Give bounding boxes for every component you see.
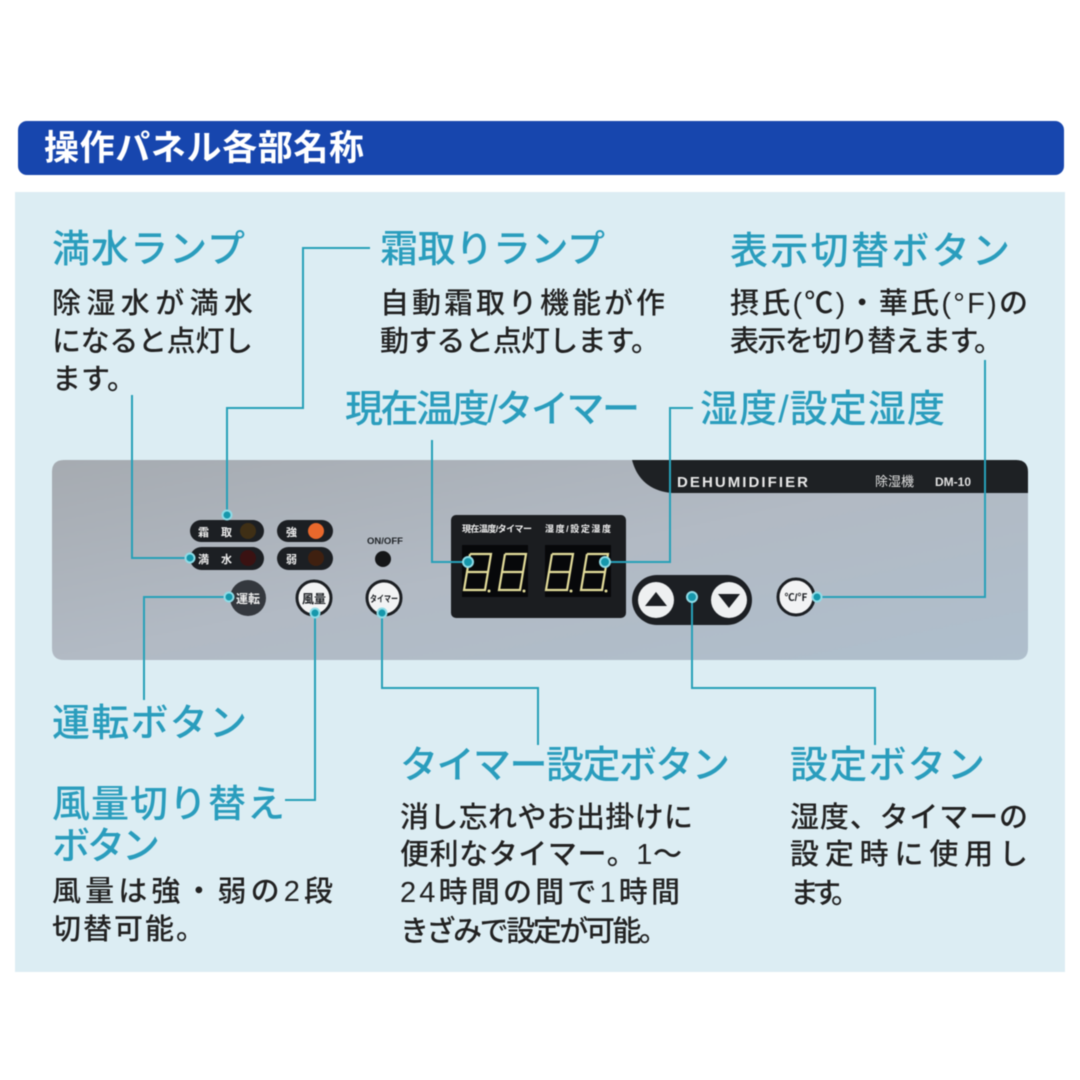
label: display switch button — [730, 231, 1028, 358]
label: air volume button: ボタン — [52, 826, 160, 868]
label: timer setting button — [400, 745, 730, 948]
lamp: weak: 弱 — [286, 553, 297, 566]
label: defrost lamp: 自動霜取り機能が作 — [380, 287, 665, 320]
title bar — [18, 121, 1064, 175]
button: timer — [367, 581, 401, 615]
button: C/F switch: ℃/℉ — [785, 593, 807, 604]
background panel — [15, 192, 1065, 972]
label: timer setting button: 消し忘れやお出掛けに — [400, 801, 693, 834]
control panel illustration — [52, 460, 1028, 660]
lamp: weak — [277, 547, 333, 570]
digital display — [451, 515, 626, 618]
button: air volume: 風量 — [302, 592, 326, 606]
label: setting button: 設定ボタン — [790, 745, 985, 787]
up/down buttons — [632, 575, 752, 625]
label: timer setting button: タイマー設定ボタン — [400, 745, 730, 787]
label: timer setting button: 24時間の間で1時間 — [400, 876, 680, 909]
button: C/F switch — [778, 579, 814, 615]
label: display switch button: 表示を切り替えます。 — [730, 325, 1003, 358]
connector lines — [132, 248, 985, 800]
lamp: full water — [190, 547, 264, 570]
model name plate: 除湿機 — [875, 474, 914, 489]
label: full water lamp: ます。 — [52, 364, 136, 396]
label: air volume button: 風量は強・弱の2段 — [52, 875, 333, 908]
label: full water lamp — [52, 229, 253, 396]
label: timer setting button: きざみで設定が可能。 — [400, 914, 668, 948]
digits — [464, 554, 608, 592]
digital display: 現在温度/タイマー — [462, 523, 532, 534]
lamp: full water: 満水 — [198, 552, 232, 566]
button: timer: タイマー — [370, 593, 398, 604]
label: defrost lamp: 霜取りランプ — [380, 229, 605, 271]
label: humidity / set humidity: 湿度/設定湿度 — [700, 389, 945, 431]
label: setting button: 設定時に使用し — [790, 838, 1028, 871]
label: air volume button: 風量切り替え — [52, 784, 285, 826]
label: timer setting button: 便利なタイマー。1～ — [400, 838, 682, 871]
label: display switch button: 摂氏(℃)・華氏(°F)の — [730, 287, 1028, 320]
model name plate: DEHUMIDIFIER — [677, 474, 808, 491]
on/off indicator — [367, 536, 403, 567]
lamp: defrost: 霜取 — [198, 526, 232, 539]
lamp: defrost — [190, 520, 264, 542]
label: full water lamp: になると点灯し — [52, 325, 253, 358]
label: current temperature / timer: 現在温度/タイマー — [345, 389, 640, 431]
label: air volume button: 切替可能。 — [52, 913, 205, 946]
digital display: 湿度/設定湿度 — [545, 523, 611, 534]
button: run: 運転 — [236, 591, 260, 606]
label: defrost lamp: 動すると点灯します。 — [380, 325, 660, 358]
button: run — [230, 580, 266, 616]
label: full water lamp: 満水ランプ — [52, 229, 245, 271]
on/off indicator: ON/OFF — [367, 536, 403, 547]
label: setting button: ます。 — [790, 878, 860, 910]
label: full water lamp: 除湿水が満水 — [52, 287, 253, 320]
button: air volume — [297, 581, 331, 615]
label: setting button — [790, 745, 1028, 910]
model name plate — [632, 460, 1028, 493]
title bar: 操作パネル各部名称 — [44, 129, 364, 168]
lamp: strong — [277, 520, 333, 542]
label: air volume button — [52, 784, 333, 946]
label: setting button: 湿度、タイマーの — [790, 801, 1028, 834]
label: run button: 運転ボタン — [52, 703, 247, 745]
label: defrost lamp — [380, 229, 665, 358]
lamp: strong: 強 — [286, 525, 297, 539]
label: display switch button: 表示切替ボタン — [730, 231, 1010, 273]
model name plate: DM-10 — [935, 475, 971, 489]
